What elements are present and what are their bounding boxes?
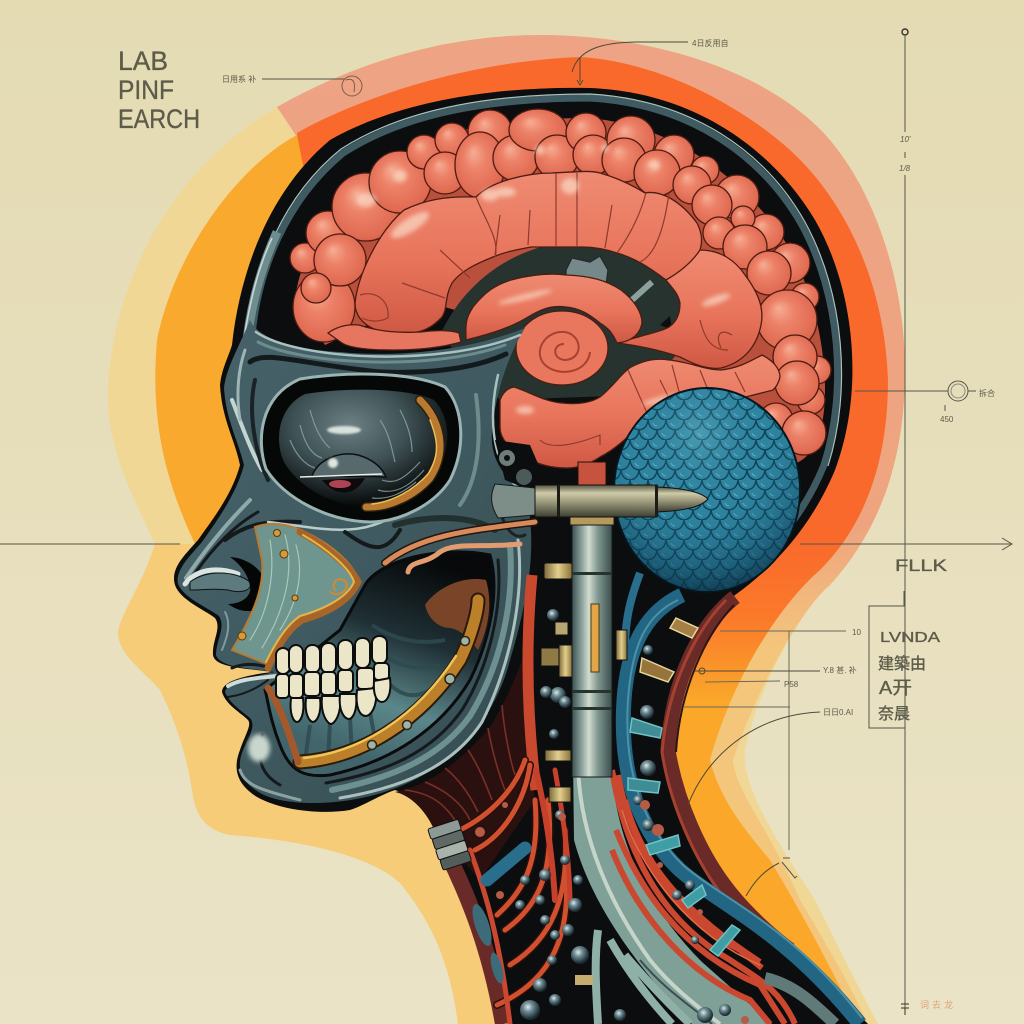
halo: pale outer silhouette xyxy=(108,35,905,1024)
eye socket xyxy=(261,374,461,522)
eye: brow highlight xyxy=(327,426,361,434)
brain: gyrus grooves xyxy=(360,173,745,445)
neck: brown muscle rim xyxy=(662,597,790,950)
neck: grey cable xyxy=(765,978,835,1024)
callouts: neck leader lines: P58 xyxy=(784,680,799,689)
brain: spiral arm xyxy=(466,274,642,343)
vertical scale line xyxy=(899,29,911,1015)
bracket legend xyxy=(869,591,940,745)
cheek: gold trim xyxy=(250,532,358,668)
bracket legend: 奈晨 xyxy=(878,705,910,723)
halo: salmon upper right layer xyxy=(277,35,905,1024)
head silhouette xyxy=(174,88,868,1024)
skull: chin highlight xyxy=(248,734,270,762)
head halo: concentric colour silhouettes xyxy=(108,35,905,1024)
skull: nostril xyxy=(228,557,268,611)
brain: main upper gyrus xyxy=(355,171,702,334)
halo: amber left layer xyxy=(155,135,340,544)
neck: red beads xyxy=(475,800,749,1024)
brain stem xyxy=(578,462,606,488)
neck: muscle strands xyxy=(405,705,515,825)
callout: right circle xyxy=(855,381,995,424)
skull: nose wing xyxy=(190,573,250,592)
footer mark: 词去龙 xyxy=(920,999,956,1010)
bracket legend: 建築由 xyxy=(878,655,926,673)
brain: spiral curl xyxy=(516,311,608,385)
neck: red wires left xyxy=(460,760,570,1024)
mouth: teal bands xyxy=(305,625,445,762)
neck interior xyxy=(395,563,862,1024)
horizontal bullet xyxy=(492,484,708,518)
blue sphere xyxy=(613,387,801,593)
vertical scale line: 10' xyxy=(900,135,911,144)
brain: highlights xyxy=(356,144,731,414)
cheek: studs xyxy=(238,530,298,640)
neck: ring segments xyxy=(628,618,740,956)
vertical metal tube xyxy=(570,517,614,777)
title: EARCH xyxy=(118,104,200,134)
vertical scale line: 1/8 xyxy=(899,164,911,173)
neck: gold clips xyxy=(541,563,627,985)
brain: lower gyrus xyxy=(500,355,780,468)
bracket legend: A开 xyxy=(879,678,912,698)
socket: gold circuit xyxy=(366,400,440,507)
brain: right lobe xyxy=(617,250,762,368)
cranium rim xyxy=(243,94,842,530)
brain: bottom left gyrus xyxy=(328,325,461,350)
callouts: neck leader lines: 10 xyxy=(852,628,861,637)
neck: blue tube left xyxy=(487,848,525,880)
facial nerve xyxy=(385,522,535,572)
skull: base shape xyxy=(178,320,531,803)
socket: eyeball area xyxy=(279,390,447,508)
skull face xyxy=(178,320,531,803)
callouts: neck leader lines: Y.8 甚. 补 xyxy=(823,665,857,675)
mouth cavity xyxy=(265,552,494,776)
brain: outer lobules xyxy=(290,109,831,455)
callouts: neck leader lines xyxy=(683,628,861,896)
halo: orange band xyxy=(297,57,888,1024)
mouth: teeth xyxy=(276,636,390,724)
neck: lower grey-green tube xyxy=(573,760,772,1024)
neck: bead clusters xyxy=(515,609,731,1023)
neck: left brown wall xyxy=(448,855,503,1024)
horizontal axis arrow xyxy=(0,538,1012,550)
mouth: copper plate xyxy=(425,579,489,650)
bracket legend: LVNDA xyxy=(880,629,940,646)
cheek panel xyxy=(232,524,358,668)
mouth: band rivets xyxy=(368,636,470,750)
gear cluster behind eye xyxy=(495,440,545,490)
neck: left red strip xyxy=(528,575,536,790)
neck: dark muscle mass xyxy=(395,660,535,880)
callout: top left: 日用系 补 xyxy=(222,74,256,84)
brain xyxy=(290,109,831,468)
neck: teal blobs left xyxy=(469,902,506,985)
mouth: gold jaw band xyxy=(268,600,478,762)
brain: inner gear plate xyxy=(440,240,691,400)
label: FLLK: FLLK xyxy=(895,556,948,575)
skull: contour highlights xyxy=(185,332,525,800)
callout: top left xyxy=(222,74,362,96)
callout: right circle: 450 xyxy=(940,415,954,424)
callouts: neck leader lines: 日日0.AI xyxy=(823,708,853,717)
halo: lower face warm yellow xyxy=(118,544,540,1024)
eye: wrinkle lines xyxy=(290,410,424,498)
title: PINF xyxy=(118,75,174,105)
cheek: teal inlay xyxy=(232,524,358,665)
callout: right circle: 拆合 xyxy=(979,388,995,398)
eye: lid xyxy=(300,454,386,493)
brain: lobule base mass xyxy=(295,118,825,465)
title: LAB xyxy=(118,46,168,76)
neck: red wires right xyxy=(612,770,795,1024)
mouth: cavity fill xyxy=(265,552,494,776)
neck: silver ring xyxy=(428,819,472,871)
callout: top centre xyxy=(572,38,728,85)
socket: rim xyxy=(261,374,461,522)
neck: teal tendon xyxy=(623,573,862,1024)
callout: top centre: 4日反用自 xyxy=(692,38,728,48)
title xyxy=(118,46,200,134)
